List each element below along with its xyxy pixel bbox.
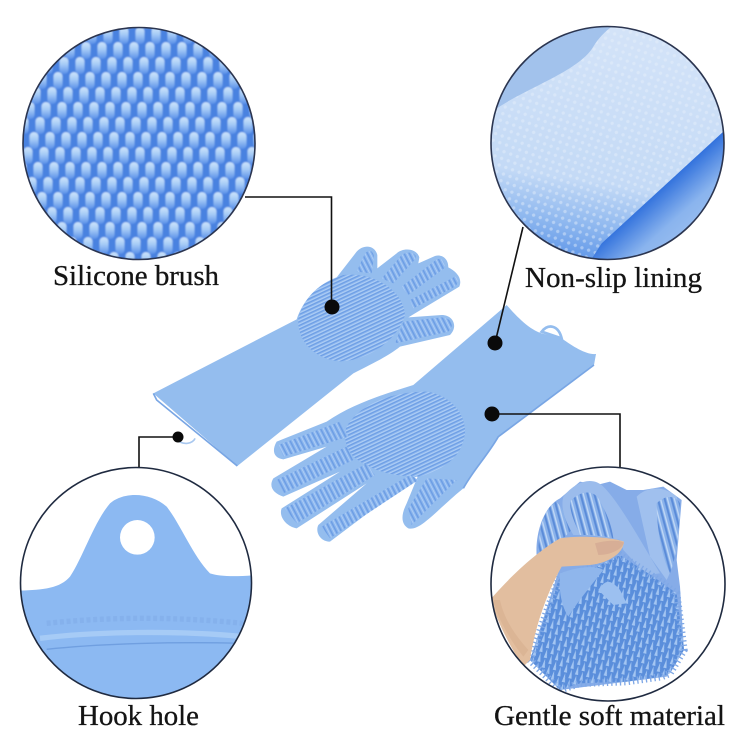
panel: gentle soft material circle (490, 467, 725, 701)
lower glove (271, 305, 596, 542)
panel: silicone brush circle (22, 26, 256, 260)
panel: non-slip lining circle (490, 26, 725, 260)
upper glove (153, 247, 460, 466)
connector: hook hole (139, 432, 184, 467)
panel: hook hole circle (18, 468, 257, 705)
gloves illustration (153, 247, 596, 542)
connector: silicone brush (245, 197, 340, 314)
connector: non-slip lining (488, 227, 523, 350)
connector: gentle soft material (484, 406, 620, 467)
label: non-slip lining: Non-slip lining (525, 263, 702, 294)
label: silicone brush: Silicone brush (53, 261, 219, 292)
label: hook hole: Hook hole (78, 701, 199, 732)
label: gentle soft material: Gentle soft material (494, 701, 725, 732)
